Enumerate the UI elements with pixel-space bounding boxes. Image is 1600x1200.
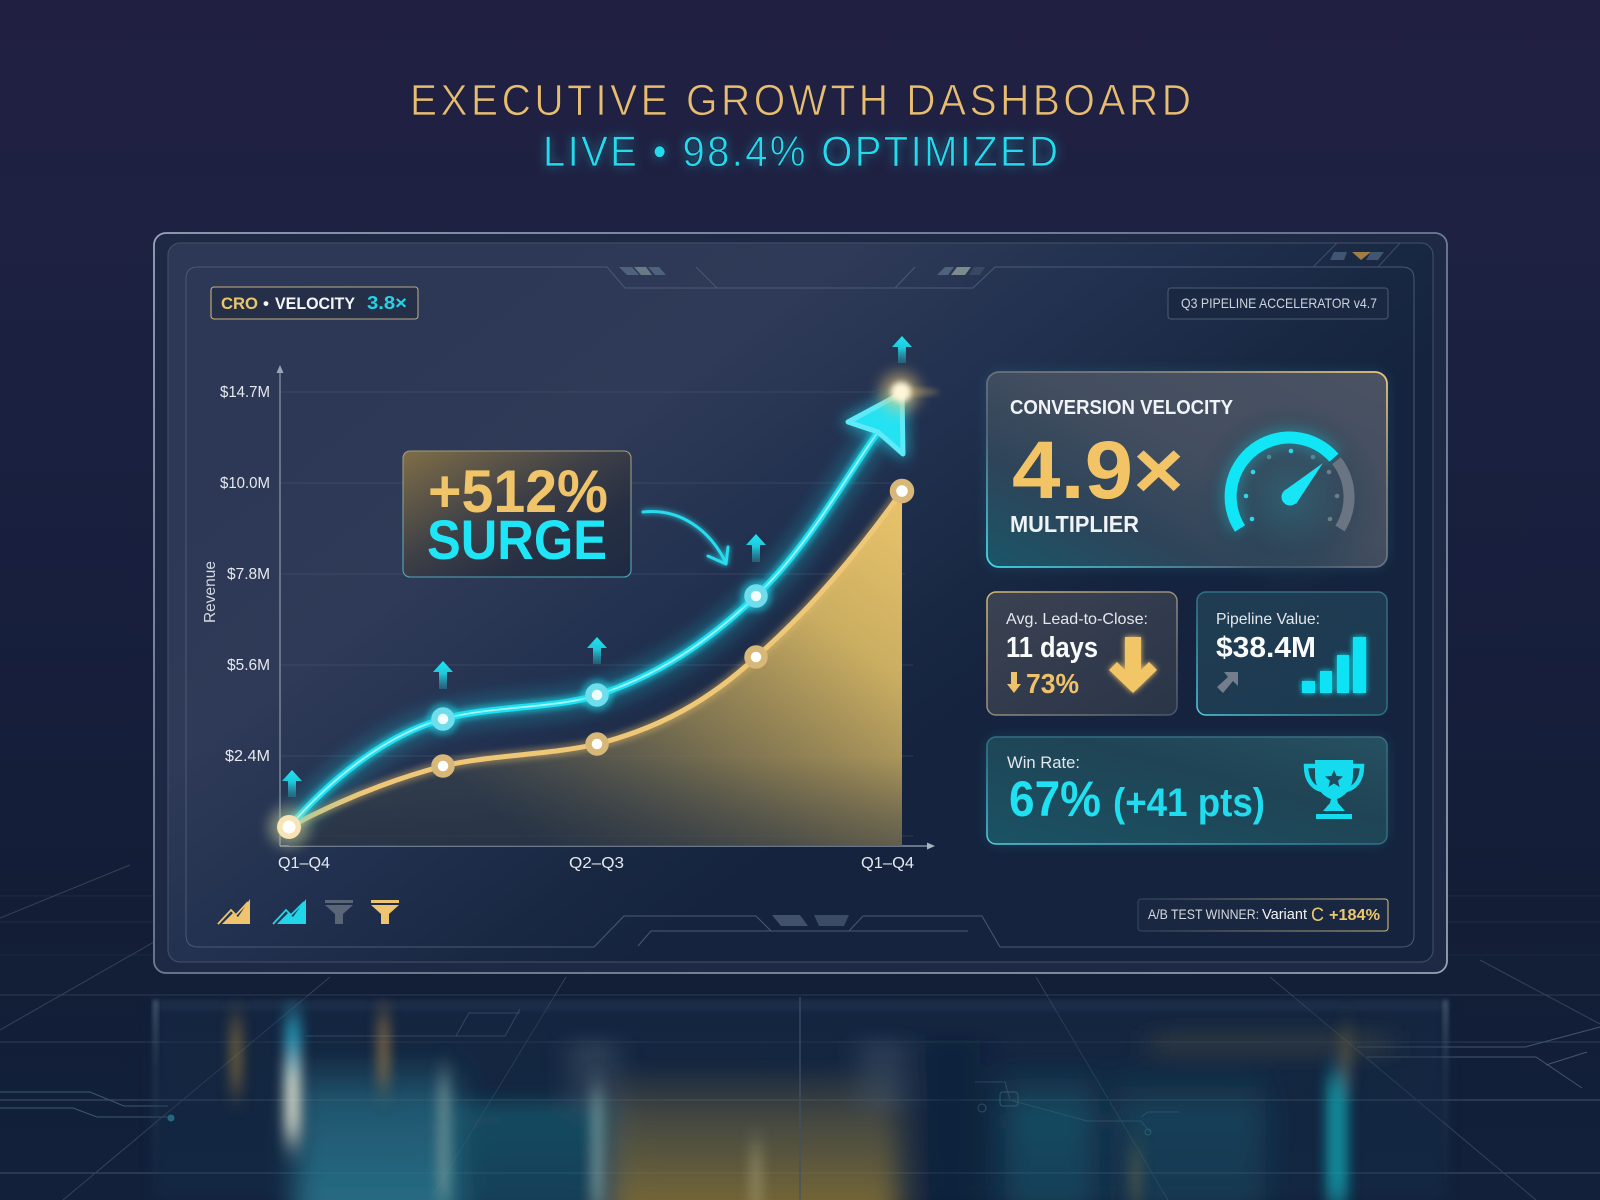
heading: executive growth dashboard: EXECUTIVE GROWTH DASHBOARD (410, 76, 1191, 124)
icon: gold growth chart (218, 899, 250, 924)
panel: pipeline value: $38.4M (1216, 632, 1316, 664)
panel: average lead to close: 73% (1026, 668, 1079, 699)
x axis (280, 842, 935, 850)
dashboard panel (154, 233, 1447, 973)
badge: A/B test winner: Variant (1262, 906, 1308, 923)
badge: pipeline accelerator version (1168, 288, 1388, 319)
panel: win rate: Win Rate: (1007, 753, 1080, 772)
badge: CRO velocity: 3.8× (367, 293, 407, 313)
data points (427, 482, 911, 774)
x axis labels: Q1–Q4 (861, 855, 914, 872)
metric: 4.9x: 4.9× (1012, 425, 1184, 516)
y axis labels: $5.6M (227, 657, 270, 674)
line chart: revenue (202, 336, 939, 872)
icon: bar chart (1302, 637, 1366, 693)
panel: average lead to close: 11 days (1006, 632, 1098, 664)
x axis labels: Q2–Q3 (569, 855, 624, 872)
label: multiplier: MULTIPLIER (1010, 511, 1139, 537)
badge: A/B test winner (1138, 899, 1388, 931)
reflection of the panel on the floor (153, 975, 1448, 1200)
panel: win rate: (+41 pts) (1113, 781, 1265, 825)
badge: A/B test winner: C (1311, 905, 1324, 926)
cyan glow around line (289, 432, 878, 827)
floor grid and circuit traces (0, 865, 1600, 1200)
icon: gold funnel (371, 900, 399, 924)
icon: trophy (1306, 760, 1362, 819)
y axis labels: $10.0M (220, 475, 270, 492)
chart grid lines (281, 392, 913, 836)
panel: win rate (987, 737, 1387, 844)
icon: gray trend arrow (1217, 672, 1238, 693)
subtitle: live status: LIVE • 98.4% OPTIMIZED (543, 128, 1058, 175)
up arrows (282, 336, 912, 797)
callout: surge (403, 451, 631, 577)
icons: legend row (218, 899, 399, 924)
x axis labels: Q1–Q4 (278, 855, 330, 872)
panel: average lead to close: Avg. Lead-to-Close: (1006, 611, 1148, 628)
y axis (276, 365, 284, 846)
badge: pipeline accelerator version: Q3 PIPELINE ACCELERATOR v4.7 (1181, 295, 1377, 311)
badge: CRO velocity: VELOCITY (275, 294, 356, 313)
heading: conversion velocity: CONVERSION VELOCITY (1010, 397, 1234, 419)
badge: CRO velocity: • (263, 294, 269, 313)
badge: A/B test winner: A/B TEST WINNER: (1148, 906, 1259, 922)
icon: cyan growth chart (273, 899, 306, 924)
callout: surge: SURGE (427, 508, 607, 571)
panel: pipeline value: Pipeline Value: (1216, 611, 1320, 628)
panel: average lead to close (987, 592, 1177, 715)
panel: pipeline value (1197, 592, 1387, 715)
start point glow (269, 807, 309, 847)
panel: conversion velocity (987, 372, 1387, 592)
end point flare (880, 372, 939, 412)
icon: gray funnel (325, 900, 353, 924)
panel: middle frame (168, 243, 1433, 962)
panel: outer glass frame (154, 233, 1447, 973)
y axis title: Revenue (202, 561, 219, 623)
y axis labels: $14.7M (220, 384, 270, 401)
cyan arrow head (848, 393, 903, 454)
panel: inner hud frame (186, 267, 1414, 947)
y axis labels: $2.4M (225, 748, 270, 765)
y axis labels: $7.8M (227, 566, 270, 583)
y axis labels (220, 384, 270, 765)
callout: surge: +512% (428, 458, 608, 525)
gauge (1231, 438, 1349, 528)
subtitle glow: LIVE • 98.4% OPTIMIZED (543, 128, 1058, 175)
badge: CRO velocity (211, 287, 418, 319)
arrow: callout to curve (643, 512, 728, 564)
badge: CRO velocity: CRO (221, 294, 258, 313)
x axis labels (278, 855, 914, 872)
panel: win rate: 67% (1009, 771, 1101, 827)
title (410, 76, 1191, 175)
gold area fill (289, 491, 902, 846)
gold line (289, 491, 902, 827)
badge: A/B test winner: +184% (1329, 907, 1380, 924)
small down arrow (1007, 672, 1021, 693)
icon: big down arrow (1109, 637, 1157, 693)
